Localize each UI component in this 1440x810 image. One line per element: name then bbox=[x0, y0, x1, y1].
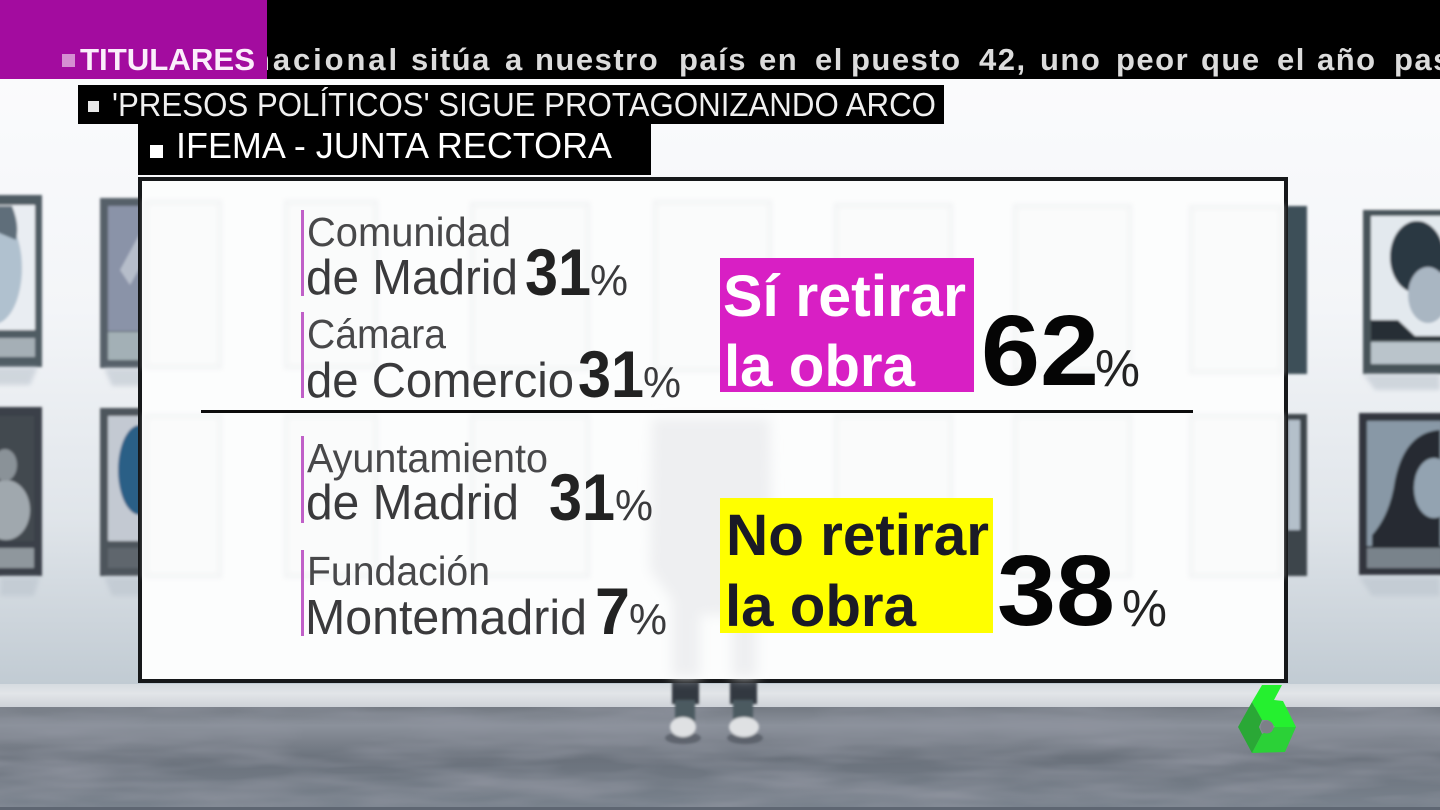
ticker bar: sitúa bbox=[411, 42, 491, 77]
entry: Comunidad de Madrid 31%: 31 bbox=[525, 235, 591, 309]
ticker bar: el bbox=[815, 42, 844, 77]
ticker bar: nuestro bbox=[535, 42, 659, 77]
headline: Presos políticos: 'PRESOS POLÍTICOS' SIGUE PROTAGONIZANDO ARCO bbox=[112, 86, 936, 123]
label: Titulares bbox=[0, 0, 267, 79]
callout: No retirar la obra 38%: 38 bbox=[997, 535, 1115, 647]
visitor legs bbox=[665, 680, 763, 744]
ticker bar bbox=[0, 0, 1440, 79]
ticker bar: peor bbox=[1116, 42, 1189, 77]
icon: laSexta green logo bbox=[1238, 685, 1296, 753]
accent bars bbox=[301, 210, 304, 636]
callout: Sí retirar la obra 62%: % bbox=[1095, 340, 1140, 398]
panel: white results box bbox=[140, 179, 1286, 681]
faded visitor silhouette bbox=[650, 418, 772, 677]
entry: Fundación Montemadrid 7%: Montemadrid bbox=[305, 591, 587, 645]
ticker bar: país bbox=[679, 42, 747, 77]
callout: Sí retirar la obra 62%: Sí retirar bbox=[723, 264, 966, 329]
faded portraits behind panel bbox=[146, 202, 1281, 576]
frame shadows bbox=[0, 367, 1440, 596]
label: Titulares: TITULARES bbox=[80, 42, 255, 77]
callout: Sí retirar la obra 62%: 62 bbox=[981, 295, 1099, 407]
entry: Fundación Montemadrid 7% bbox=[305, 548, 667, 648]
entry: Cámara de Comercio 31%: 31 bbox=[578, 337, 644, 411]
ticker bar: 42, bbox=[979, 42, 1027, 77]
ticker bar: que bbox=[1201, 42, 1261, 77]
entry: Comunidad de Madrid 31%: de Madrid bbox=[306, 251, 518, 305]
entry: Fundación Montemadrid 7%: Fundación bbox=[307, 548, 490, 594]
callout: No retirar la obra 38%: la obra bbox=[725, 574, 917, 639]
entry: Fundación Montemadrid 7%: % bbox=[629, 595, 667, 644]
entry: Ayuntamiento de Madrid 31% bbox=[306, 435, 653, 534]
ticker bar: puesto bbox=[851, 42, 962, 77]
entry: Ayuntamiento de Madrid 31%: Ayuntamiento bbox=[307, 435, 548, 481]
callout: No retirar la obra 38% bbox=[720, 498, 1167, 647]
entry: Cámara de Comercio 31%: de Comercio bbox=[306, 354, 574, 408]
ticker bar: uno bbox=[1040, 42, 1101, 77]
callout: No retirar la obra 38%: % bbox=[1122, 580, 1167, 638]
entry: Comunidad de Madrid 31%: Comunidad bbox=[307, 209, 511, 255]
entry: Comunidad de Madrid 31% bbox=[306, 209, 628, 309]
framed portraits on the wall bbox=[0, 195, 1440, 576]
ticker bar: el bbox=[1277, 42, 1306, 77]
entry: Ayuntamiento de Madrid 31%: 31 bbox=[549, 460, 615, 534]
entry: Ayuntamiento de Madrid 31%: % bbox=[615, 481, 653, 530]
callout: No retirar la obra 38%: No retirar bbox=[726, 503, 989, 568]
headline: IFEMA - Junta Rectora: IFEMA - JUNTA RECTORA bbox=[176, 125, 612, 166]
callout: Sí retirar la obra 62% bbox=[720, 258, 1140, 407]
entry: Comunidad de Madrid 31%: % bbox=[590, 256, 628, 305]
entry: Ayuntamiento de Madrid 31%: de Madrid bbox=[306, 476, 519, 530]
entry: Cámara de Comercio 31%: Cámara bbox=[307, 311, 446, 357]
ticker bar: año bbox=[1317, 42, 1377, 77]
entry: Cámara de Comercio 31% bbox=[306, 311, 681, 411]
ticker bar: a bbox=[505, 42, 524, 77]
callout: Sí retirar la obra 62%: la obra bbox=[724, 334, 916, 399]
ticker bar: nacional bbox=[251, 42, 400, 77]
entry: Cámara de Comercio 31%: % bbox=[643, 358, 681, 407]
headline: IFEMA - Junta Rectora bbox=[138, 124, 651, 175]
divider between the two blocs bbox=[201, 410, 1193, 413]
ticker bar: en bbox=[759, 42, 798, 77]
entry: Fundación Montemadrid 7%: 7 bbox=[595, 574, 630, 648]
